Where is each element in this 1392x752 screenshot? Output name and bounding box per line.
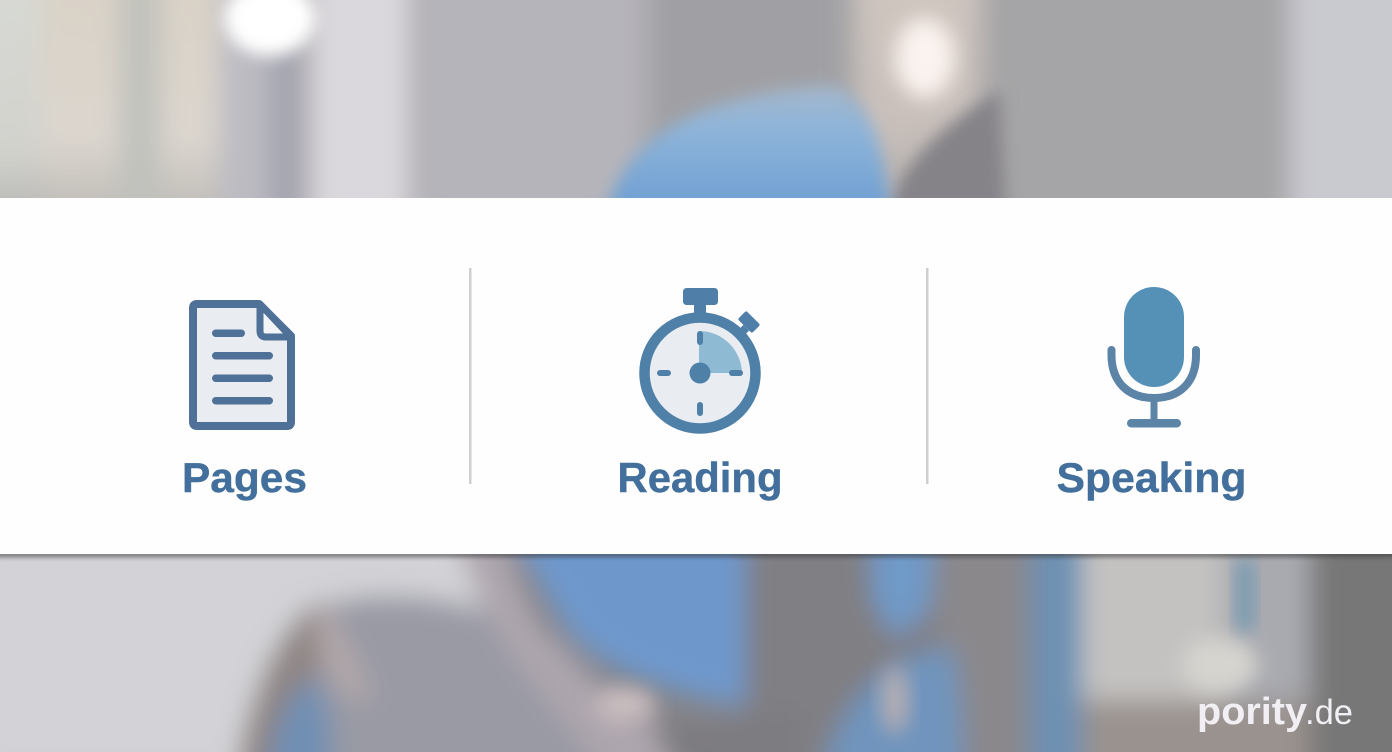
label: Speaking: Speaking: [1056, 454, 1246, 501]
logo: pority.de: [1197, 691, 1353, 733]
icon: stopwatch: [644, 288, 760, 428]
logo: pority.de: .de: [1305, 693, 1353, 732]
panel shadow: [0, 552, 1392, 557]
divider left: [469, 268, 472, 484]
logo: pority.de: pority: [1197, 691, 1307, 733]
icon: microphone: [1112, 287, 1196, 428]
label: Reading: Reading: [618, 454, 782, 501]
icon: document: [193, 304, 291, 426]
background: blurred room top: [0, 0, 1392, 230]
divider right: [926, 268, 928, 484]
background: lamp glow right: [895, 18, 955, 98]
background: lamp glow left: [224, 0, 316, 56]
label: Pages: Pages: [182, 454, 307, 501]
background: blue chair top: [606, 85, 890, 215]
background: dark cushion: [888, 90, 1006, 215]
panel: white band: [0, 198, 1392, 554]
background: blurred room bottom: [0, 530, 1392, 752]
